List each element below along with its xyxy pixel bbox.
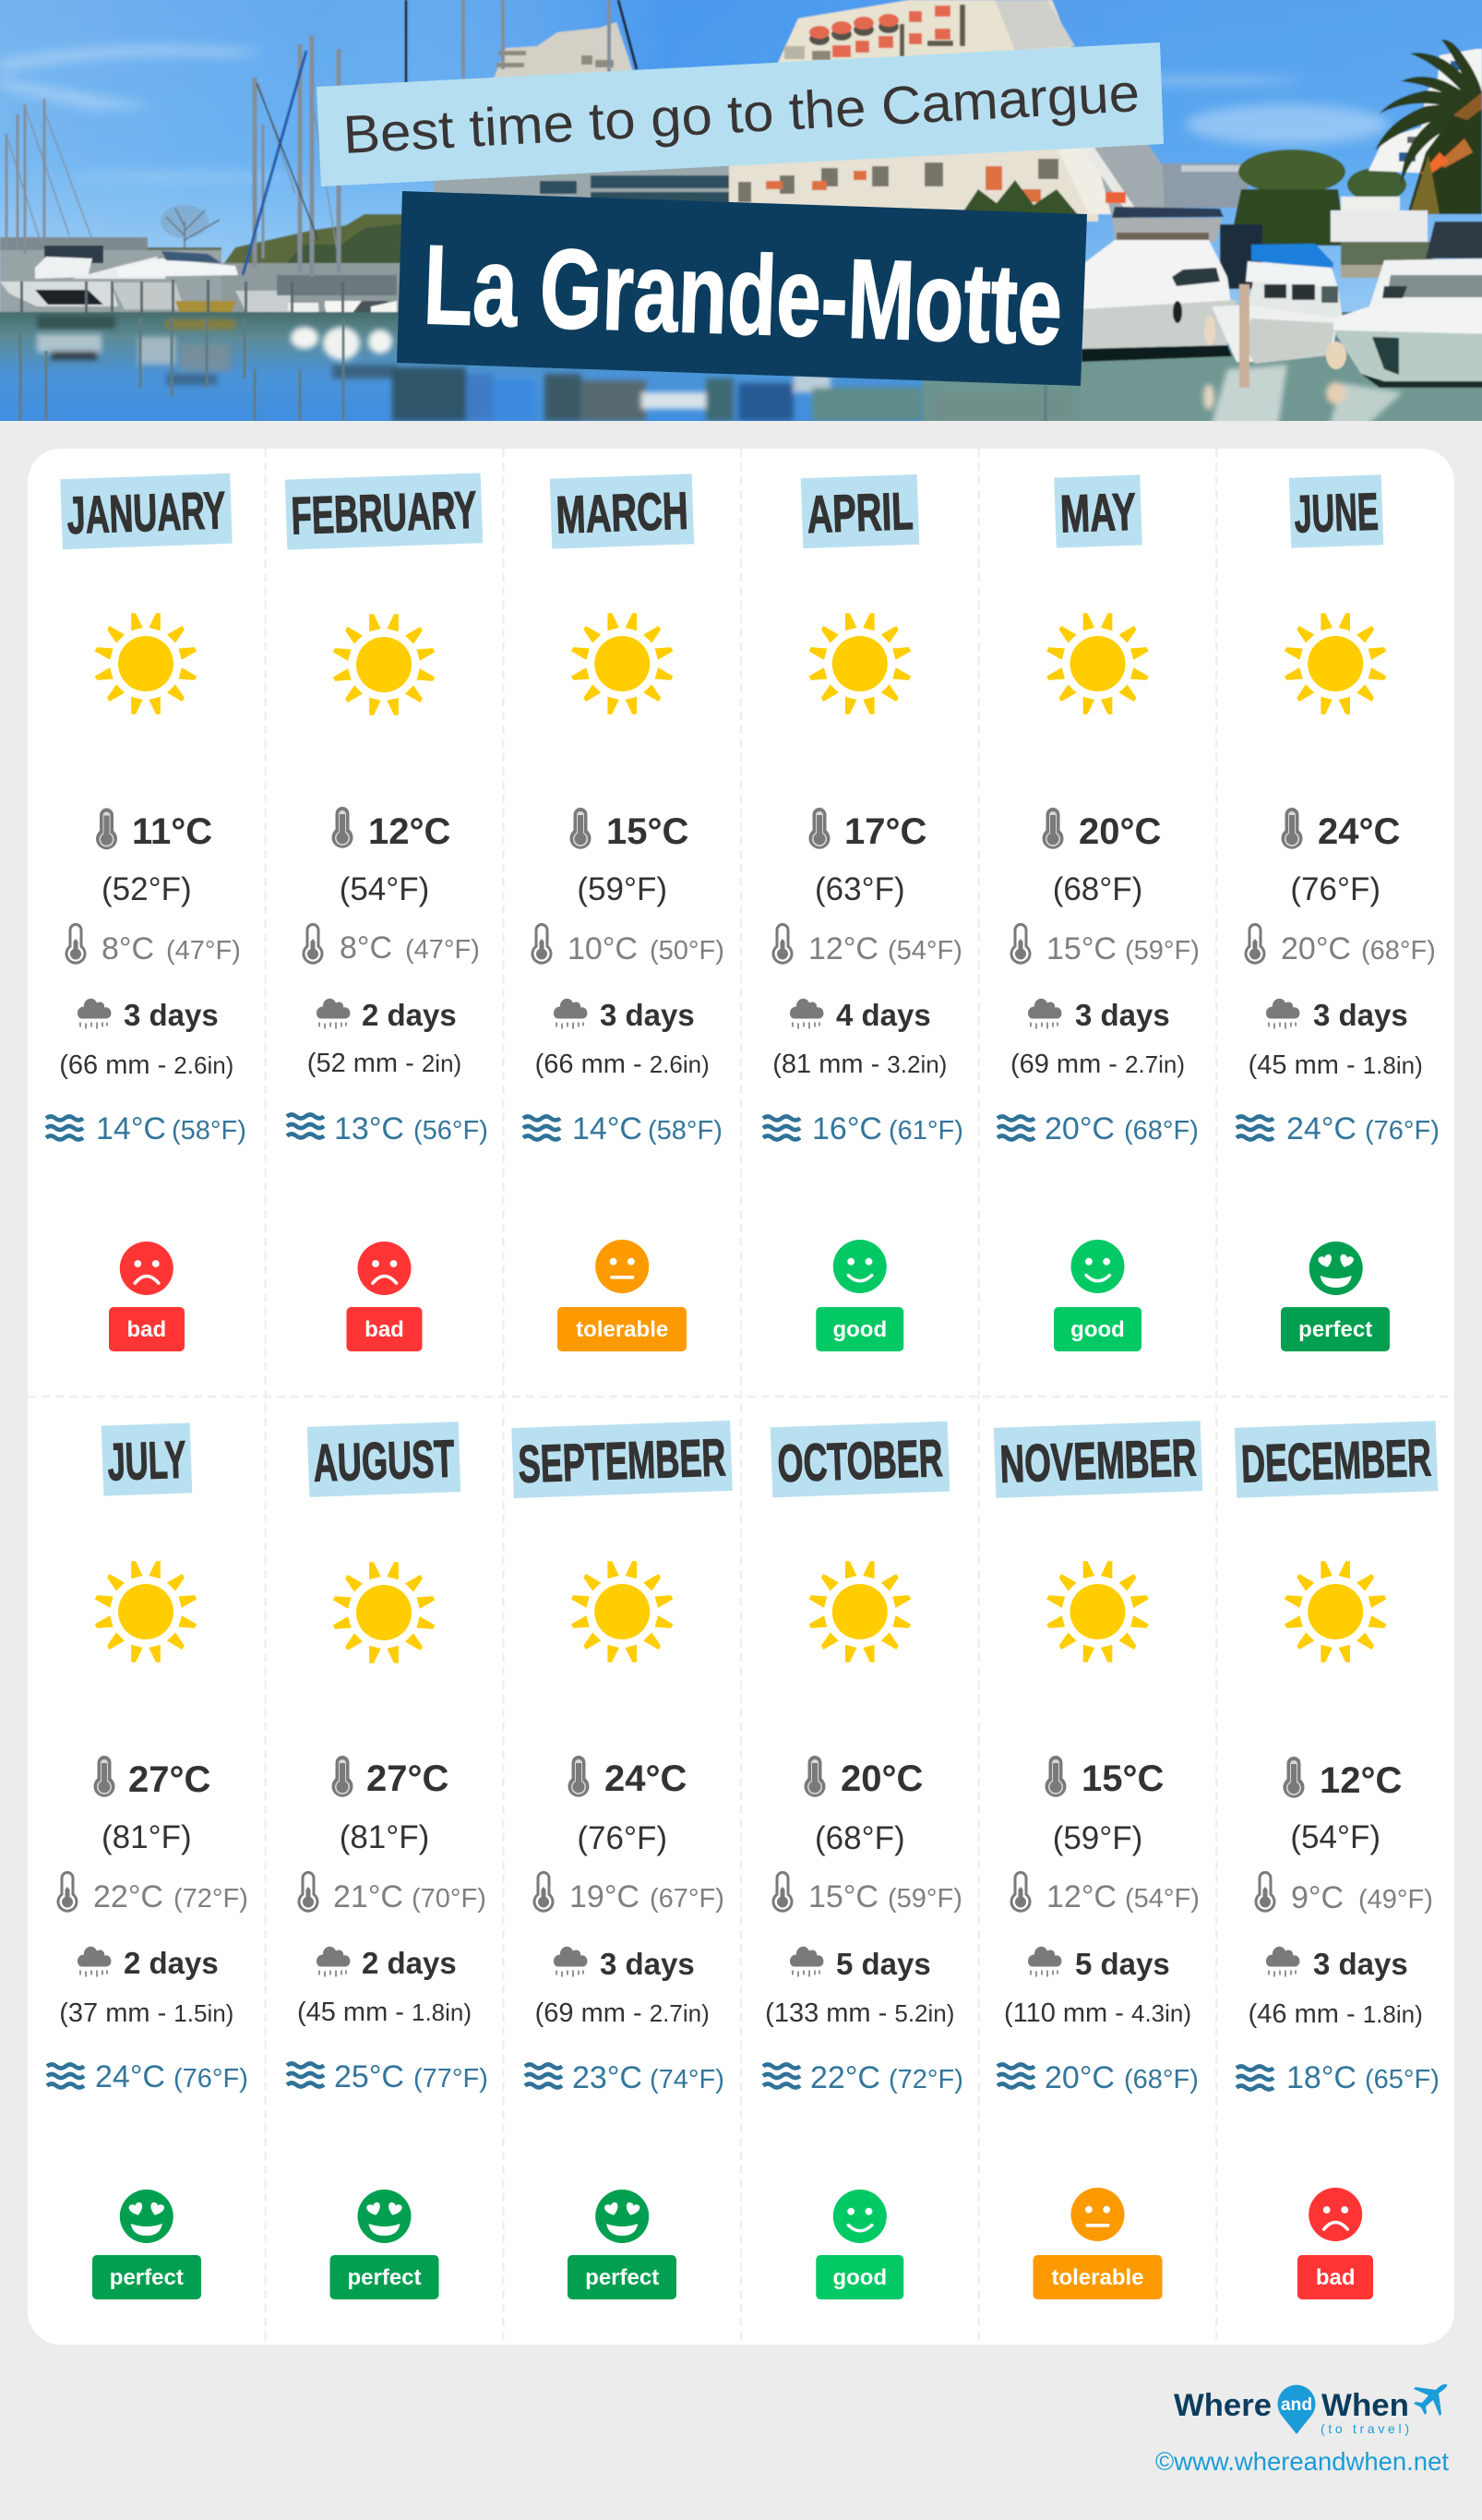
sea temperature: 22°C	[810, 2060, 880, 2095]
icon: sun	[333, 614, 435, 715]
high temperature fahrenheit: (52°F)	[102, 871, 192, 907]
rainfall amount: (45 mm - 1.8in)	[1249, 1050, 1423, 1080]
rating: perfect	[1281, 1242, 1390, 1351]
sea temperature	[46, 1111, 246, 1146]
icon: sun	[809, 1561, 911, 1662]
icon: map pin	[1277, 2385, 1316, 2434]
month: January	[46, 474, 246, 1351]
rating: tolerable	[557, 1240, 687, 1351]
rating: bad	[347, 1242, 423, 1351]
rating: tolerable: tolerable	[1051, 2265, 1144, 2290]
rating: good	[816, 1240, 903, 1351]
icon: sun	[95, 1561, 197, 1662]
rating: bad	[109, 1242, 185, 1351]
rating: perfect: perfect	[585, 2265, 659, 2290]
low temperature: (49°F)	[1358, 1885, 1433, 1914]
sea temperature: (76°F)	[1365, 1116, 1440, 1146]
month label: OCTOBER	[777, 1429, 944, 1494]
low temperature: 19°C	[569, 1879, 639, 1914]
month label: APRIL	[806, 482, 914, 545]
high temperature	[1281, 808, 1400, 852]
rainfall amount: (37 mm - 1.5in)	[59, 1998, 233, 2028]
sea temperature: 14°C	[572, 1111, 642, 1146]
icon: sun	[571, 1561, 673, 1662]
rainy days	[554, 998, 695, 1032]
rainfall amount: (81 mm - 3.2in)	[772, 1050, 947, 1079]
sea temperature: 23°C	[572, 2060, 642, 2095]
sea temperature	[998, 1111, 1199, 1146]
rating: perfect: perfect	[347, 2265, 422, 2290]
logo: Where and When	[1174, 2384, 1447, 2436]
rating: bad: bad	[1316, 2265, 1356, 2290]
month label: SEPTEMBER	[518, 1428, 727, 1494]
rainfall amount: (66 mm - 2.6in)	[535, 1050, 710, 1079]
month label: JUNE	[1293, 482, 1380, 545]
icon: sun	[809, 613, 911, 714]
high temperature fahrenheit: (59°F)	[1053, 1820, 1142, 1856]
rating: perfect	[92, 2190, 201, 2299]
month: March	[523, 474, 724, 1351]
low temperature: (59°F)	[888, 1884, 962, 1914]
logo: Where and When: (to travel)	[1321, 2421, 1409, 2436]
month label	[511, 1421, 733, 1498]
low temperature: 12°C	[808, 931, 878, 966]
high temperature: 11°C	[132, 811, 212, 852]
rainy days: 5 days	[1075, 1947, 1170, 1981]
sea temperature	[998, 2060, 1199, 2095]
rating: tolerable: tolerable	[576, 1317, 668, 1342]
high temperature fahrenheit: (76°F)	[577, 1820, 667, 1856]
month label	[60, 474, 233, 549]
rating: tolerable	[1034, 2188, 1163, 2299]
rainfall amount: (52 mm - 2in)	[307, 1049, 461, 1078]
reflections	[37, 316, 1403, 426]
sea temperature: 25°C	[334, 2059, 404, 2094]
sea temperature: 14°C	[96, 1111, 166, 1146]
high temperature fahrenheit: (59°F)	[577, 871, 667, 907]
high temperature fahrenheit: (63°F)	[815, 871, 905, 907]
low temperature: 21°C	[333, 1879, 403, 1914]
rainy days: 3 days	[1313, 998, 1408, 1032]
high temperature fahrenheit: (81°F)	[102, 1819, 192, 1855]
sea temperature	[287, 2059, 488, 2094]
low temperature	[1244, 923, 1436, 966]
low temperature	[297, 1871, 486, 1914]
month label	[307, 1422, 460, 1497]
rainy days: 5 days	[836, 1947, 931, 1981]
high temperature: 24°C	[1318, 811, 1400, 852]
sea temperature: 16°C	[812, 1111, 882, 1146]
low temperature: (70°F)	[412, 1884, 486, 1914]
rainy days	[317, 1946, 457, 1980]
rating: bad: bad	[365, 1317, 404, 1342]
icon: sun	[1046, 1561, 1149, 1662]
subtitle banner	[317, 42, 1164, 186]
high temperature fahrenheit: (81°F)	[340, 1819, 429, 1855]
high temperature: 27°C	[366, 1758, 448, 1799]
rainy days: 3 days	[1313, 1947, 1408, 1981]
high temperature fahrenheit: (54°F)	[1290, 1819, 1380, 1855]
low temperature: 8°C	[340, 930, 392, 966]
rainfall amount: (45 mm - 1.8in)	[297, 1998, 472, 2027]
month: May	[998, 474, 1200, 1351]
rainy days	[1266, 998, 1408, 1032]
high temperature: 15°C	[606, 811, 688, 852]
sea temperature: (74°F)	[650, 2065, 724, 2094]
high temperature fahrenheit: (54°F)	[340, 871, 429, 907]
low temperature	[65, 923, 241, 966]
high temperature: 15°C	[1082, 1758, 1164, 1799]
sea temperature	[523, 1111, 723, 1146]
masts and rigging	[6, 0, 609, 277]
rainfall amount: (69 mm - 2.7in)	[1010, 1050, 1185, 1079]
rainy days	[1266, 1947, 1408, 1981]
sea temperature: (68°F)	[1124, 2065, 1199, 2094]
icon: sun	[571, 613, 673, 714]
month: October	[763, 1422, 963, 2299]
high temperature: 17°C	[844, 811, 926, 852]
sea temperature: 20°C	[1045, 2060, 1115, 2095]
low temperature: 22°C	[93, 1879, 163, 1914]
high temperature	[568, 1756, 687, 1799]
low temperature: 10°C	[568, 931, 638, 966]
sea temperature	[47, 2059, 248, 2094]
high temperature	[1283, 1757, 1402, 1801]
month label: JULY	[106, 1431, 187, 1492]
rating: perfect: perfect	[1298, 1317, 1372, 1342]
sea temperature: 24°C	[1286, 1111, 1357, 1146]
right boats	[1220, 224, 1262, 289]
low temperature: (47°F)	[405, 935, 480, 965]
sea temperature: (77°F)	[413, 2064, 488, 2094]
month label: FEBRUARY	[291, 481, 478, 546]
sea temperature: (56°F)	[413, 1116, 488, 1146]
low temperature	[771, 923, 962, 966]
rating: good: good	[1070, 1317, 1125, 1342]
high temperature	[808, 808, 926, 852]
rainy days	[790, 998, 931, 1032]
month label	[550, 474, 694, 549]
sea temperature	[763, 1111, 963, 1146]
icon: sun	[333, 1562, 435, 1663]
rating: good	[1054, 1240, 1141, 1351]
month: September	[511, 1421, 733, 2299]
rating: good: good	[832, 1317, 887, 1342]
high temperature fahrenheit: (68°F)	[815, 1820, 905, 1856]
rainfall amount: (46 mm - 1.8in)	[1249, 1999, 1423, 2029]
rainy days: 2 days	[124, 1946, 219, 1980]
white palm-side building	[1368, 49, 1482, 175]
sea temperature: (76°F)	[173, 2064, 248, 2094]
low temperature	[303, 923, 480, 966]
low temperature	[1010, 1871, 1200, 1914]
low temperature: 8°C	[102, 931, 154, 966]
month label	[102, 1422, 192, 1496]
low temperature: 12°C	[1046, 1879, 1117, 1914]
low temperature: 9°C	[1291, 1880, 1344, 1915]
title banner	[397, 191, 1087, 386]
month label	[1289, 474, 1383, 548]
low temperature: 20°C	[1281, 931, 1351, 966]
low temperature: (54°F)	[888, 936, 962, 966]
high temperature: 20°C	[1079, 811, 1161, 852]
sea temperature: (68°F)	[1124, 1116, 1199, 1146]
sea temperature: 18°C	[1286, 2060, 1357, 2095]
month label: JANUARY	[66, 481, 227, 546]
low temperature	[533, 1871, 724, 1914]
month: April	[763, 474, 963, 1351]
rainy days	[317, 998, 457, 1032]
month: December	[1235, 1421, 1440, 2299]
low temperature: (54°F)	[1125, 1884, 1200, 1914]
subtitle text: Best time to go to the Camargue	[341, 63, 1141, 165]
rating: perfect: perfect	[110, 2265, 184, 2290]
rating: bad	[1297, 2188, 1373, 2299]
rainy days: 4 days	[836, 998, 931, 1032]
high temperature	[805, 1756, 923, 1799]
low temperature: 15°C	[1046, 931, 1117, 966]
rainfall amount: (133 mm - 5.2in)	[765, 1998, 954, 2028]
month label	[994, 1421, 1202, 1498]
title text: La Grande-Motte	[422, 222, 1064, 368]
sea temperature	[763, 2060, 963, 2095]
month label: MARCH	[555, 482, 689, 545]
high temperature	[332, 807, 450, 852]
rainy days: 3 days	[1075, 998, 1170, 1032]
rainy days: 3 days	[600, 1947, 695, 1981]
low temperature: (47°F)	[166, 936, 241, 966]
high temperature	[96, 809, 212, 852]
month label	[801, 474, 919, 548]
month label: MAY	[1059, 483, 1137, 544]
pine trees	[1238, 150, 1345, 194]
high temperature	[332, 1756, 448, 1799]
rainy days: 3 days	[124, 998, 219, 1032]
sea temperature: (58°F)	[648, 1116, 723, 1146]
sea temperature	[1237, 2060, 1440, 2095]
rating: perfect	[568, 2190, 676, 2299]
high temperature: 24°C	[604, 1758, 687, 1799]
icon: sun	[95, 613, 197, 714]
rainy days: 2 days	[362, 998, 457, 1032]
website credit: ©www.whereandwhen.net	[1155, 2447, 1449, 2476]
high temperature: 12°C	[1320, 1760, 1402, 1801]
rainy days: 2 days	[362, 1946, 457, 1980]
low temperature	[532, 923, 724, 966]
low temperature: (72°F)	[173, 1884, 248, 1914]
high temperature	[1043, 808, 1161, 852]
high temperature: 20°C	[841, 1758, 923, 1799]
rainfall amount: (66 mm - 2.6in)	[59, 1050, 233, 1080]
rating: good: good	[832, 2265, 887, 2290]
header photo: La Grande-Motte marina	[0, 0, 1482, 421]
low temperature	[57, 1871, 248, 1914]
month label	[771, 1422, 950, 1497]
sea temperature	[287, 1111, 488, 1146]
distant buildings	[494, 22, 637, 88]
month label: NOVEMBER	[999, 1428, 1198, 1494]
icon: sun	[1285, 613, 1386, 714]
rainy days	[554, 1947, 695, 1981]
sea temperature: (65°F)	[1365, 2065, 1440, 2094]
high temperature: 27°C	[128, 1759, 210, 1800]
rainy days	[790, 1947, 931, 1981]
rainy days	[78, 1946, 219, 1980]
icon: sun	[1046, 613, 1149, 714]
high temperature	[94, 1756, 210, 1800]
month label: AUGUST	[312, 1429, 456, 1494]
low temperature: (68°F)	[1361, 936, 1436, 966]
rating: bad: bad	[126, 1317, 166, 1342]
icon: map pin: and	[1281, 2395, 1312, 2415]
month: February	[285, 473, 488, 1351]
sea temperature	[1237, 1111, 1440, 1146]
low temperature: (67°F)	[650, 1884, 724, 1914]
low temperature	[1255, 1871, 1433, 1915]
low temperature	[771, 1871, 962, 1914]
month: August	[287, 1422, 488, 2299]
sea temperature: (58°F)	[172, 1116, 246, 1146]
rainy days	[78, 998, 219, 1032]
sea temperature: 24°C	[95, 2059, 165, 2094]
logo: Where and When: When	[1321, 2388, 1409, 2423]
rainy days	[1028, 1947, 1170, 1981]
low temperature: 15°C	[808, 1879, 878, 1914]
high temperature: 12°C	[368, 811, 450, 852]
sea temperature: (72°F)	[889, 2065, 963, 2094]
sea temperature: 13°C	[334, 1111, 404, 1146]
logo: Where and When: Where	[1174, 2388, 1272, 2423]
sea temperature: (61°F)	[889, 1116, 963, 1146]
water	[0, 312, 1482, 426]
rainfall amount: (110 mm - 4.3in)	[1004, 1998, 1191, 2028]
rainy days: 3 days	[600, 998, 695, 1032]
sea temperature: 20°C	[1045, 1111, 1115, 1146]
icon: plane	[1414, 2384, 1447, 2416]
high temperature fahrenheit: (76°F)	[1290, 871, 1380, 907]
month: November	[994, 1421, 1202, 2299]
trees and palms	[960, 180, 1080, 217]
sign and small white structures	[1341, 197, 1400, 211]
low temperature: (59°F)	[1125, 936, 1200, 966]
month label	[285, 473, 483, 550]
palm fronds	[1375, 40, 1482, 185]
rainfall amount: (69 mm - 2.7in)	[535, 1998, 710, 2028]
high temperature	[1045, 1756, 1164, 1799]
icon: sun	[1285, 1561, 1386, 1662]
month: June	[1237, 474, 1440, 1351]
low temperature	[1010, 923, 1200, 966]
rating: good	[816, 2190, 903, 2299]
low temperature: (50°F)	[650, 936, 724, 966]
left quay and boats	[0, 237, 148, 250]
sea temperature	[525, 2060, 724, 2095]
building strip below banner	[434, 157, 729, 222]
rainy days	[1028, 998, 1170, 1032]
panel: monthly calendar	[28, 449, 1454, 2345]
high temperature	[570, 808, 688, 852]
rating: perfect	[330, 2190, 439, 2299]
month: July	[47, 1422, 248, 2299]
month label	[1054, 474, 1142, 548]
high temperature fahrenheit: (68°F)	[1053, 871, 1142, 907]
